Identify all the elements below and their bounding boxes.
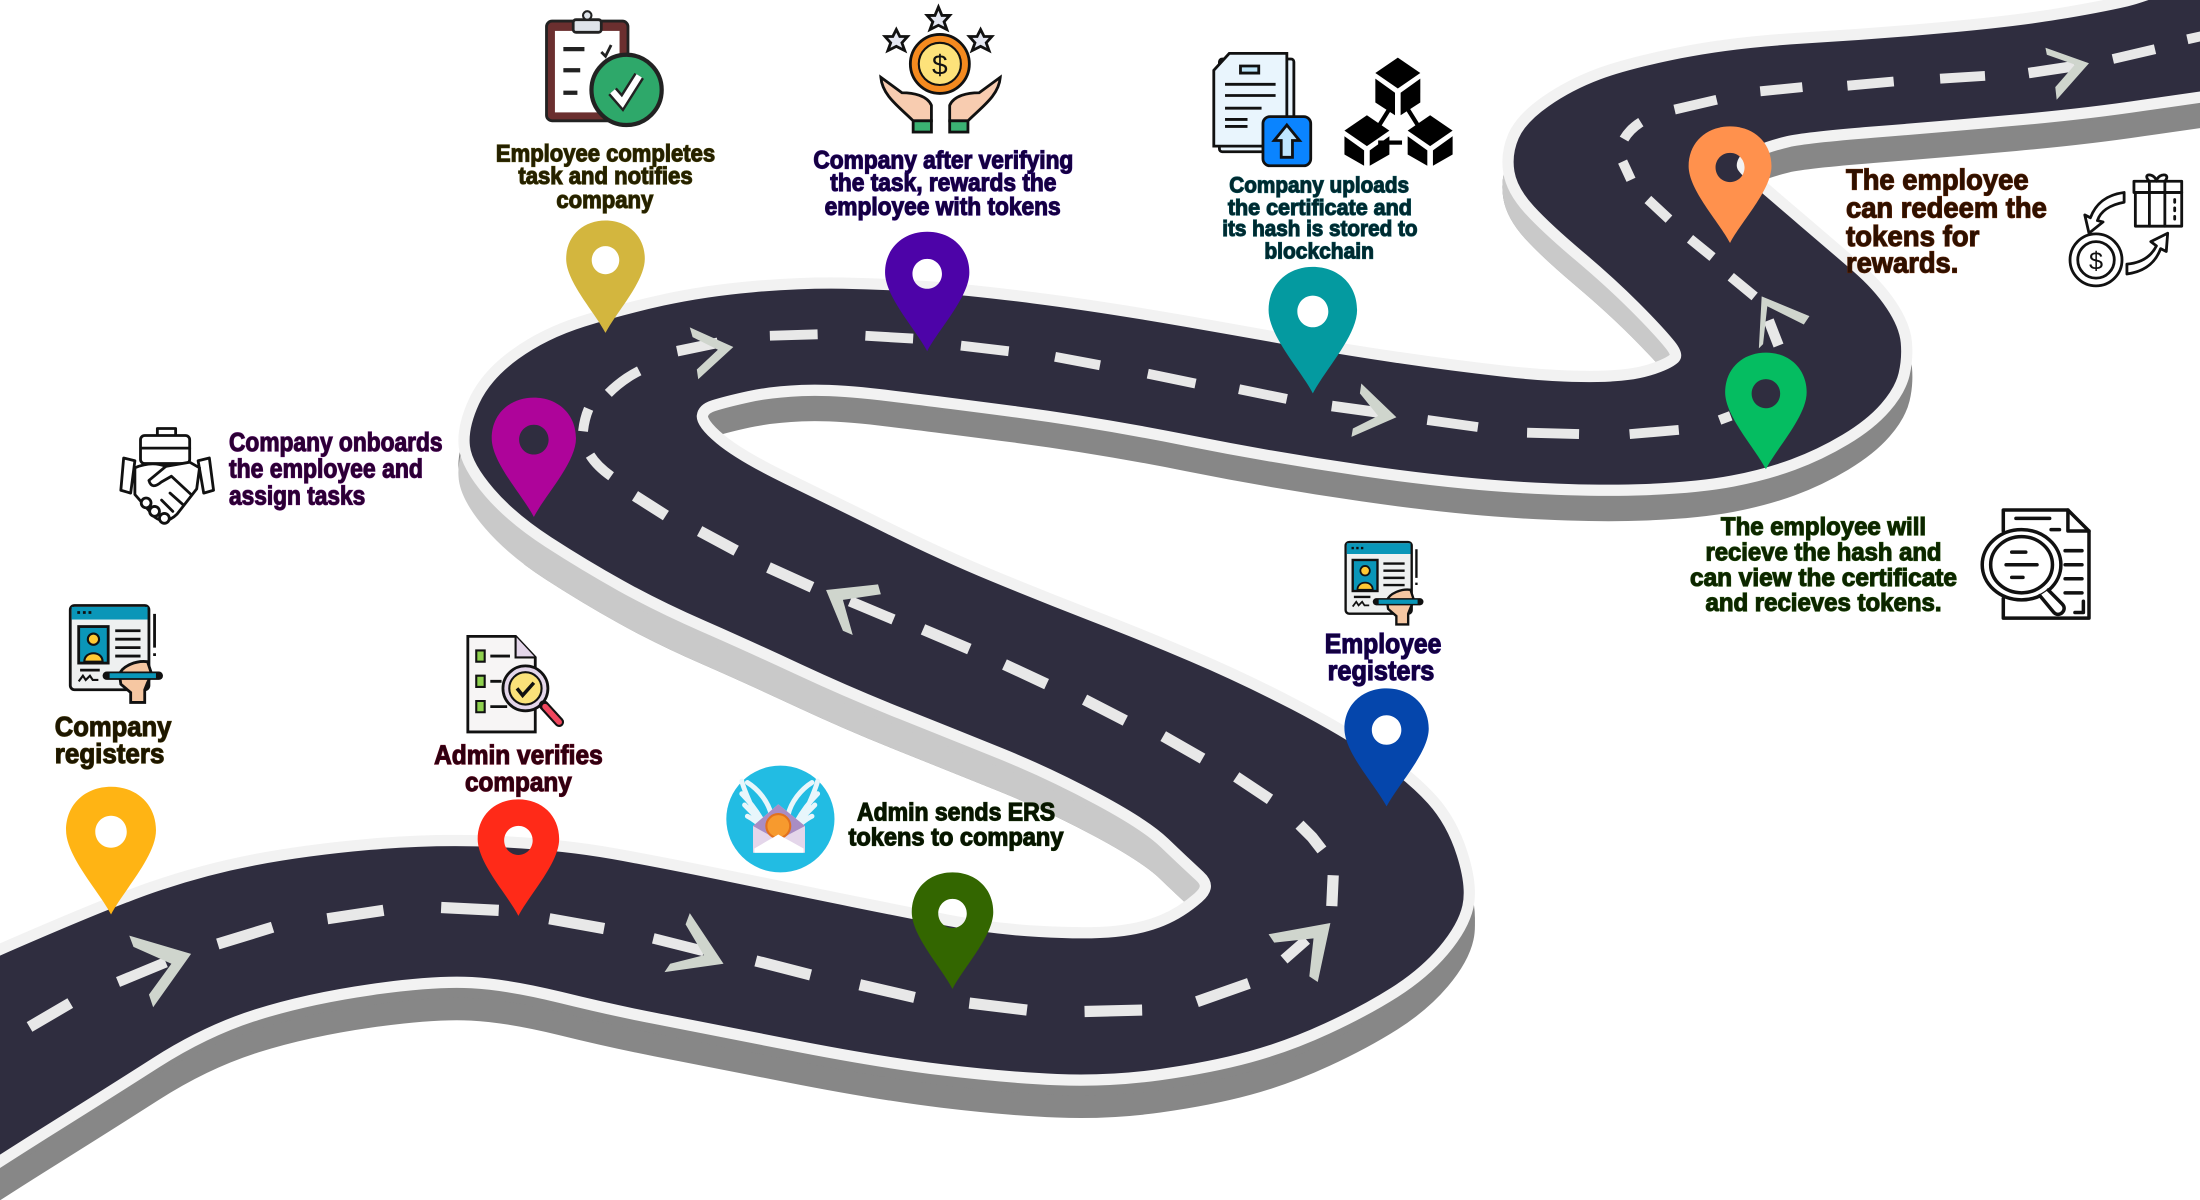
label: employee completes task: task and notifies xyxy=(518,163,693,190)
pin: company registers xyxy=(66,787,156,915)
label: admin sends ERS tokens xyxy=(849,799,1064,852)
label: company uploads certificate xyxy=(1222,172,1417,263)
label: company uploads certificate: the certificate and xyxy=(1228,195,1412,220)
icon: employee registration form xyxy=(1346,542,1420,624)
icon: company registration form xyxy=(70,605,159,702)
label: employee redeems tokens: tokens for xyxy=(1846,221,1979,253)
arrow 1 xyxy=(118,936,191,1007)
label: employee registers: Employee xyxy=(1325,628,1441,659)
label: admin sends ERS tokens: Admin sends ERS xyxy=(857,799,1055,826)
label: employee redeems tokens: rewards. xyxy=(1846,248,1958,280)
pin: employee redeems xyxy=(1689,126,1771,243)
icon: clipboard with check xyxy=(546,11,662,125)
pin: admin verifies xyxy=(478,799,559,916)
icon: admin verification document xyxy=(468,636,559,732)
pin: admin sends tokens xyxy=(912,872,993,989)
label: admin verifies company: company xyxy=(465,767,572,797)
icon: hands holding coin with stars xyxy=(881,7,1000,132)
label: employee receives the hash: can view the certificate xyxy=(1690,565,1957,592)
icon: magnifier over document xyxy=(1982,510,2089,618)
label: employee completes task: Employee completes xyxy=(496,141,715,168)
label: employee redeems tokens xyxy=(1846,165,2047,280)
label: employee redeems tokens: The employee xyxy=(1846,165,2029,197)
label: employee registers xyxy=(1325,628,1441,686)
pin: company onboards xyxy=(492,398,576,517)
icon: blockchain cubes xyxy=(1344,58,1453,166)
label: company onboards the employee: the employee and xyxy=(229,454,423,484)
icon: handshake with briefcase xyxy=(121,428,214,523)
label: admin verifies company: Admin verifies xyxy=(434,740,603,770)
label: employee completes task: company xyxy=(556,187,654,214)
label: company registers: Company xyxy=(55,711,172,742)
label: employee receives the hash: recieve the hash and xyxy=(1705,540,1941,567)
label: employee receives the hash: and recieves tokens. xyxy=(1705,590,1941,617)
label: company registers xyxy=(55,711,172,769)
arrow 8 xyxy=(2029,48,2089,100)
icon: gift and coin exchange: $ xyxy=(2089,248,2103,276)
label: company onboards the employee: assign tasks xyxy=(229,480,365,510)
icon: hands holding coin with stars: $ xyxy=(932,49,948,80)
pin: employee receives hash xyxy=(1725,353,1807,469)
label: company onboards the employee xyxy=(229,427,443,510)
label: employee registers: registers xyxy=(1328,655,1434,686)
arrow 4 xyxy=(826,584,893,635)
arrow 2 xyxy=(653,913,724,972)
label: employee completes task xyxy=(496,141,715,214)
pin: employee registers xyxy=(1344,688,1429,806)
arrow 5 xyxy=(677,327,733,379)
pin: employee completes task xyxy=(566,221,645,333)
icon: bitcoin envelope with wings xyxy=(726,766,834,872)
label: admin sends ERS tokens: tokens to company xyxy=(849,825,1064,852)
label: company uploads certificate: blockchain xyxy=(1264,238,1374,263)
icon: gift and coin exchange xyxy=(2070,175,2182,286)
label: company onboards the employee: Company onboards xyxy=(229,427,443,457)
label: company uploads certificate: its hash is stored to xyxy=(1222,216,1417,241)
label: company rewards employee: employee with tokens xyxy=(825,194,1061,221)
label: company rewards employee: Company after verifying xyxy=(813,148,1073,175)
arrow 6 xyxy=(1332,384,1396,437)
pin: company rewards xyxy=(885,232,969,351)
arrow 7 xyxy=(1759,296,1809,348)
arrow 3 xyxy=(1269,923,1330,982)
label: employee receives the hash: The employee will xyxy=(1721,514,1926,541)
icon: document upload xyxy=(1214,53,1311,166)
label: company rewards employee xyxy=(813,148,1073,221)
pin: company uploads xyxy=(1269,267,1357,393)
label: company rewards employee: the task, rewards the xyxy=(830,170,1056,197)
label: employee redeems tokens: can redeem the xyxy=(1846,193,2047,225)
label: company registers: registers xyxy=(55,738,164,769)
label: employee receives the hash xyxy=(1690,514,1957,617)
label: admin verifies company xyxy=(434,740,603,797)
label: company uploads certificate: Company uploads xyxy=(1229,172,1409,197)
